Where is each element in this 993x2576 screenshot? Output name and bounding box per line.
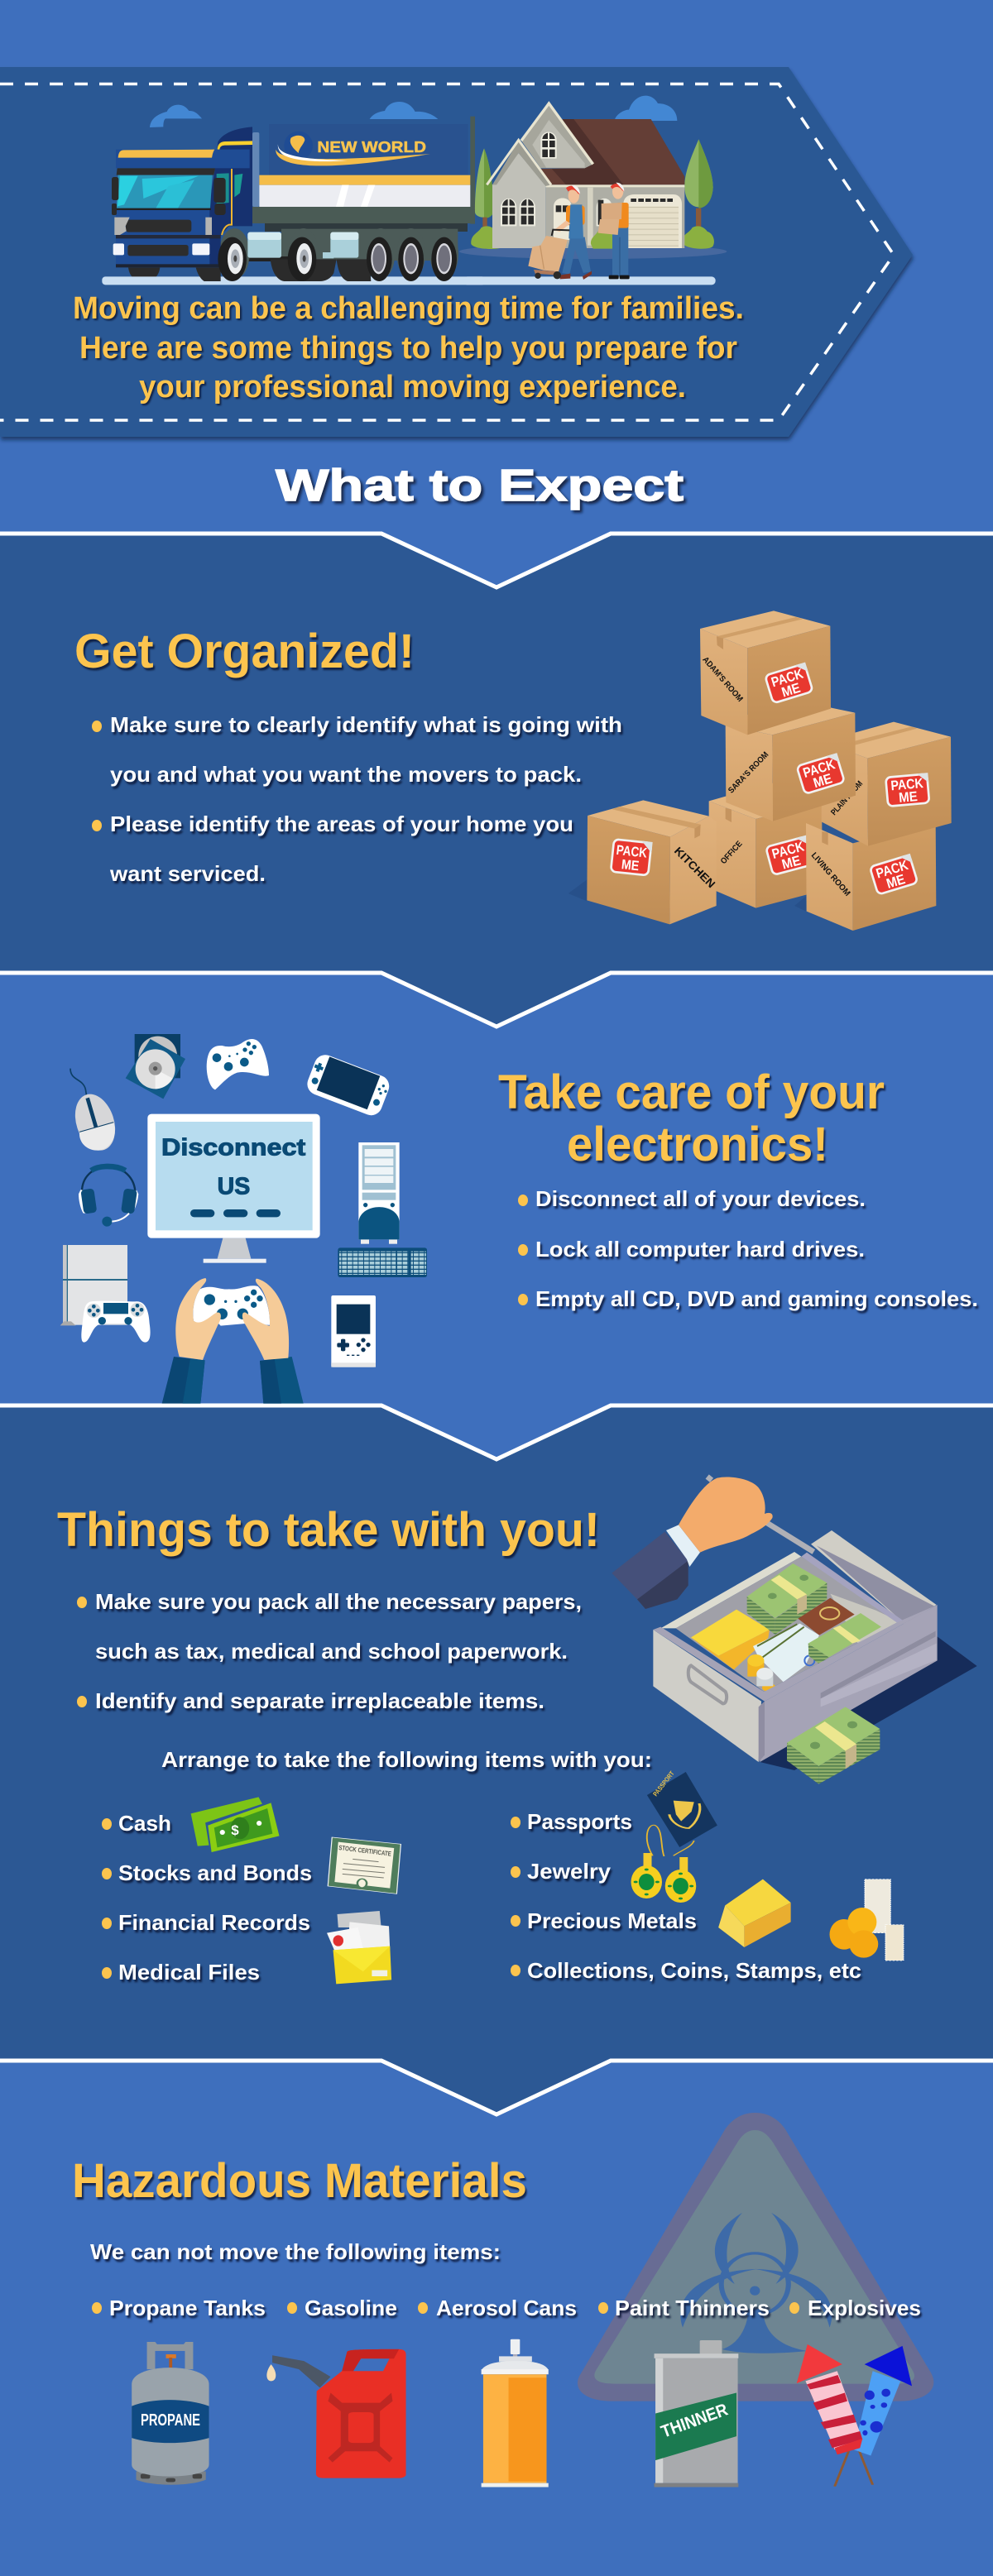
box: office	[709, 783, 822, 908]
gold bar	[691, 1610, 770, 1669]
icon: propane tank	[132, 2342, 209, 2485]
bullet list: such as tax, medical and school paperwork.	[95, 1639, 568, 1664]
small money stack	[808, 1613, 881, 1664]
illustration: truck	[102, 102, 486, 285]
icon: gold bar	[718, 1879, 791, 1947]
banner arrow shape	[0, 67, 913, 437]
passport title: PASSPORT	[651, 1769, 676, 1798]
icon: gamepad left	[81, 1301, 151, 1343]
intro text	[73, 291, 744, 405]
thinner label: THINNER	[659, 2400, 731, 2442]
icon: passport	[647, 1772, 717, 1847]
cash symbol: $	[231, 1822, 239, 1838]
lid handle	[708, 1477, 813, 1552]
road end	[463, 276, 716, 285]
bullet list: Make sure you pack all the necessary papers,	[95, 1589, 582, 1614]
truck logo: NEW WORLD	[317, 138, 426, 156]
bullet list: Lock all computer hard drives.	[535, 1237, 865, 1262]
icon: aerosol can	[482, 2339, 549, 2487]
box: plain room: PLAIN ROOM	[829, 779, 865, 817]
bullet list	[92, 712, 622, 886]
icon: pc tower	[358, 1142, 400, 1244]
box: sara's room: SARA'S ROOM	[727, 750, 770, 795]
icon: biohazard warning triangle	[578, 2113, 933, 2401]
bullet list: want serviced.	[109, 861, 266, 886]
box: office: PACK	[770, 838, 806, 862]
box: kitchen	[587, 800, 717, 924]
tree right	[682, 139, 714, 249]
box: adam's room: ADAM'S ROOM	[700, 655, 745, 704]
panel: things to take background	[0, 1405, 993, 2114]
bullet list: you and what you want the movers to pack.	[110, 762, 582, 787]
propane label: PROPANE	[141, 2411, 200, 2430]
icon: console	[60, 1245, 127, 1325]
box shadows	[568, 879, 806, 912]
banner stitching	[0, 84, 894, 420]
heading: Take care of your	[498, 1065, 885, 1119]
item list right: Passports	[527, 1809, 632, 1834]
intro text: Moving can be a challenging time for families.	[73, 291, 744, 326]
panel: electronics	[60, 1034, 978, 1404]
item bullets: Paint Thinners	[615, 2296, 770, 2320]
money stack	[747, 1563, 827, 1635]
box: office: OFFICE	[719, 840, 745, 866]
box: living room: LIVING ROOM	[809, 851, 851, 898]
icon: monitor: US	[218, 1173, 250, 1199]
icon: gas can	[266, 2349, 406, 2478]
panel: get organized	[74, 610, 952, 931]
heading: electronics!	[567, 1118, 828, 1171]
icon: stamps and coins	[829, 1879, 904, 1961]
heading	[498, 1065, 885, 1171]
truck road	[102, 276, 486, 285]
bullet list	[518, 1186, 978, 1311]
truck trailer	[252, 117, 475, 232]
box: adam's room: PACK	[770, 666, 805, 690]
bullet list: Identify and separate irreplaceable items.	[95, 1688, 544, 1713]
box: adam's room	[700, 610, 831, 735]
box: kitchen: KITCHEN	[672, 845, 717, 890]
box shadow	[760, 1636, 977, 1770]
panel: things to take with you	[57, 1477, 977, 1985]
loose money stack	[787, 1707, 880, 1784]
passport	[798, 1598, 855, 1635]
illustration: house and movers	[459, 96, 727, 285]
icon: mouse	[69, 1069, 122, 1156]
icon: clouds	[150, 102, 438, 127]
box: living room: ME	[885, 871, 907, 892]
illustration: devices	[60, 1034, 427, 1404]
box: adam's room: ME	[780, 680, 802, 701]
item list left: Stocks and Bonds	[118, 1860, 312, 1885]
heading: what to expect: What to Expect	[276, 461, 684, 510]
illustration: open safe box	[612, 1477, 977, 1784]
coins	[747, 1654, 776, 1692]
item bullets: Explosives	[808, 2296, 921, 2320]
box: sara's room: PACK	[801, 756, 837, 781]
icon: cd	[126, 1034, 185, 1099]
mover with dolly	[528, 185, 592, 280]
icon: monitor: Disconnect	[161, 1135, 306, 1161]
section dividers	[0, 534, 993, 2114]
icon: cash	[191, 1797, 280, 1852]
item list left: Medical Files	[118, 1960, 260, 1985]
panel: intro banner	[0, 67, 913, 437]
item list left: Cash	[118, 1811, 171, 1836]
hand	[679, 1477, 773, 1553]
icon: portable player	[331, 1295, 376, 1367]
truck chassis	[219, 228, 458, 279]
box: plain room: PACK	[890, 775, 923, 793]
truck fuel tanks	[247, 232, 358, 258]
cuff	[666, 1525, 700, 1567]
intro text: Here are some things to help you prepare for	[79, 331, 737, 366]
box: kitchen: ME	[621, 856, 640, 874]
heading: Get Organized!	[74, 625, 415, 678]
shadow under house	[459, 244, 727, 259]
bullet list: Make sure to clearly identify what is going with	[110, 712, 622, 737]
icon: gamepad with hands	[162, 1278, 304, 1404]
intro text: your professional moving experience.	[139, 370, 686, 405]
truck logo	[276, 132, 430, 165]
truck cab	[112, 127, 252, 281]
icon: headset	[79, 1166, 138, 1227]
item list left: Financial Records	[118, 1910, 310, 1935]
item icons	[191, 1769, 904, 1984]
heading: Hazardous Materials	[72, 2154, 527, 2208]
icon: gamepad top	[207, 1039, 269, 1089]
item list right	[511, 1809, 861, 1983]
intro line: We can not move the following items:	[90, 2239, 501, 2264]
item list right: Collections, Coins, Stamps, etc	[527, 1958, 861, 1983]
panel: hazardous materials	[72, 2113, 933, 2487]
box: sara's room	[726, 697, 856, 821]
box: kitchen: PACK	[616, 842, 648, 861]
drawer body	[653, 1530, 938, 1762]
icon: handheld console	[305, 1051, 392, 1118]
item bullets: Propane Tanks	[109, 2296, 266, 2320]
hazard item icons	[132, 2339, 912, 2487]
icon: keyboard	[338, 1247, 427, 1277]
item list right: Jewelry	[527, 1859, 612, 1884]
drawer front rim	[653, 1605, 938, 1702]
certificate title: STOCK CERTIFICATE	[338, 1844, 392, 1858]
item bullets: Gasoline	[305, 2296, 397, 2320]
box: plain room	[822, 722, 952, 846]
box: sara's room: ME	[812, 770, 834, 791]
subheading: Arrange to take the following items with you:	[161, 1747, 652, 1772]
icon: earrings	[631, 1825, 696, 1903]
item bullets: Aerosol Cans	[436, 2296, 577, 2320]
sleeve	[612, 1532, 688, 1609]
item list left	[102, 1811, 312, 1985]
box: living room	[806, 821, 936, 931]
bullet list: Please identify the areas of your home you	[110, 812, 573, 836]
heading: Things to take with you!	[57, 1503, 600, 1557]
box: living room: PACK	[874, 857, 910, 882]
box: plain room: ME	[898, 788, 919, 806]
papers	[753, 1624, 819, 1682]
item bullets	[92, 2296, 921, 2320]
bullet list	[77, 1589, 582, 1713]
tree left	[471, 148, 503, 249]
icon: thinner can	[655, 2340, 738, 2487]
truck wheels	[196, 237, 457, 281]
icon: stock certificate	[328, 1837, 401, 1894]
box: office: ME	[780, 852, 803, 873]
house	[487, 102, 684, 249]
icon: fireworks	[797, 2344, 912, 2487]
item list right: Precious Metals	[527, 1908, 697, 1933]
bullet list: Empty all CD, DVD and gaming consoles.	[535, 1286, 978, 1311]
bullet list: Disconnect all of your devices.	[535, 1186, 866, 1211]
icon: monitor	[147, 1114, 320, 1263]
cloud	[615, 96, 677, 121]
panel: get organized background	[0, 534, 993, 1027]
mover with boxes	[598, 183, 630, 279]
illustration: pile of boxes	[568, 610, 952, 931]
icon: medical files envelope	[327, 1911, 391, 1984]
